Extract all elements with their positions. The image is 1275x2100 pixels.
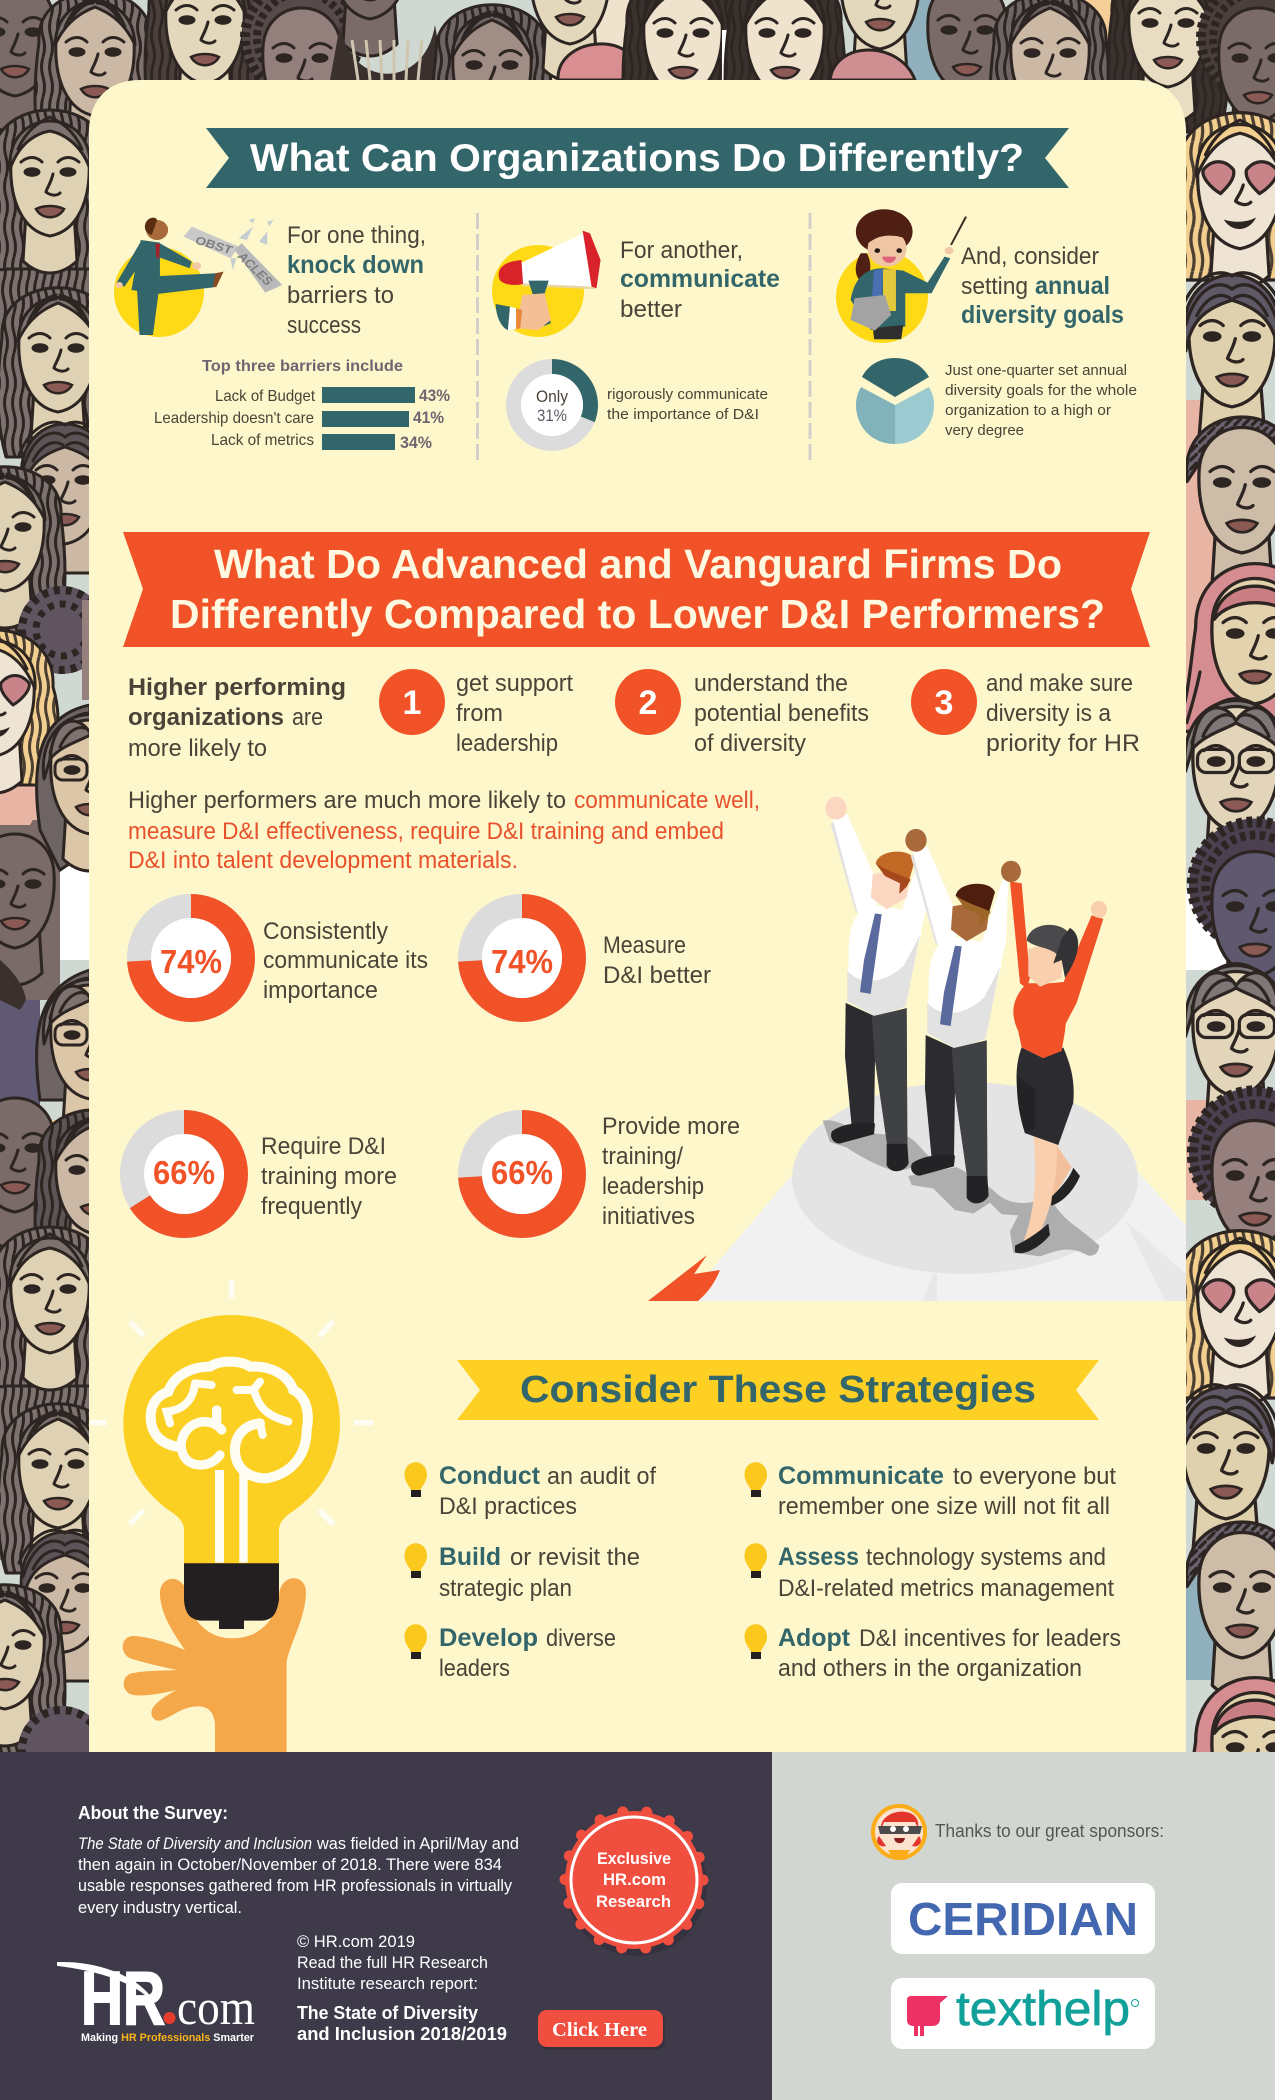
logo: HR.com: com [177, 1979, 255, 2035]
donut chart: 66% provide training: leadership [602, 1173, 704, 1200]
strategy: conduct: Conduct [439, 1462, 541, 1490]
strategy: communicate: to everyone but [953, 1463, 1116, 1490]
heading banner: What Can Organizations Do Differently? [206, 128, 1069, 188]
strategy: communicate [778, 1462, 1116, 1520]
strategy: adopt: D&I incentives for leaders [859, 1625, 1121, 1652]
strategy: communicate: remember one size will not fit all [778, 1493, 1110, 1520]
list: strategies right column [744, 1462, 1121, 1682]
text: just one-quarter: Just one-quarter set annual [945, 362, 1127, 379]
top row of faces [0, 0, 1275, 174]
donut chart: 66% require training: frequently [261, 1193, 362, 1220]
donut chart: only 31%: Only [536, 387, 568, 406]
bar chart: top three barriers: 41% [413, 408, 444, 427]
bar chart: top three barriers: 34% [400, 433, 432, 452]
donut chart: 66% require training: 66% [153, 1154, 215, 1191]
numbered item 3: diversity is a [986, 700, 1112, 727]
numbered item 2: 2 [639, 684, 657, 722]
text: about the survey: was fielded in April/May and [316, 1834, 519, 1853]
text: higher performing organizations: Higher performing [128, 674, 346, 701]
strategy: conduct: D&I practices [439, 1493, 577, 1520]
text: higher performing organizations: organizations [128, 704, 284, 731]
button: Click Here [538, 2010, 665, 2050]
icon: megaphone [492, 231, 601, 337]
heading banner: What Do Advanced and Vanguard Firms Do: What Do Advanced and Vanguard Firms Do [214, 541, 1062, 587]
strategy: develop [439, 1624, 616, 1682]
text: knock down: knock down [287, 251, 424, 279]
strategy: build: Build [439, 1543, 501, 1571]
text: higher performing organizations: are [292, 704, 323, 731]
text: about the survey: About the Survey: [78, 1803, 228, 1823]
strategy: build [439, 1543, 640, 1602]
donut chart: 66% provide training: training/ [602, 1143, 683, 1170]
donut chart: 74% measure: 74% [491, 943, 553, 980]
text: thanks to our great sponsors: Thanks to our great sponsors: [935, 1821, 1164, 1841]
icon: man kicking through obstacles: ACLES [234, 250, 276, 288]
heading banner: What Do Advanced and Vanguard Firms Do: Differently Compared to Lower D&I Performers? [170, 591, 1105, 637]
text: report credit: © HR.com 2019 [297, 1932, 415, 1951]
logo: HR.com [58, 1956, 255, 2044]
column: knock down barriers [114, 218, 450, 452]
donut chart: 66% provide training: 66% [491, 1154, 553, 1191]
logo: texthelp: texthelp [956, 1983, 1130, 2036]
icon: bulb bullet [744, 1624, 767, 1659]
text: annual diversity goals: diversity goals [961, 301, 1124, 329]
text: about the survey: then again in October/November of 2018. There were 834 [78, 1855, 502, 1874]
donut chart: 74% consistently communicate [127, 894, 428, 1022]
donut chart: 74% measure: Measure [603, 932, 686, 959]
panel: footer about the survey [0, 1752, 772, 2100]
strategy: adopt: Adopt [778, 1624, 851, 1652]
donut chart: only 31% [506, 359, 598, 451]
donut chart: 74% measure [458, 894, 711, 1022]
donut chart: 66% require training [120, 1110, 397, 1238]
icon: mascot avatar [873, 1806, 925, 1858]
heading banner: Consider These Strategies: Consider These Strategies [520, 1369, 1036, 1411]
icon: bulb bullet [404, 1624, 427, 1659]
numbered item 3: priority for HR [986, 730, 1140, 757]
text: annual diversity goals [961, 243, 1124, 329]
donut chart: 74% measure: D&I better [603, 962, 711, 989]
logo: texthelp [891, 1978, 1155, 2049]
strategy: assess: Assess [778, 1543, 859, 1571]
text: higher performers paragraph: D&I into talent development materials. [128, 847, 518, 874]
strategy: assess [778, 1543, 1114, 1602]
strategy: adopt [778, 1624, 1121, 1682]
strategy: conduct [439, 1462, 656, 1520]
bar chart: top three barriers: Lack of Budget [215, 388, 316, 405]
bar chart: top three barriers: Lack of metrics [211, 432, 314, 449]
numbered item 3: and make sure [986, 670, 1133, 697]
text: annual diversity goals: annual [1035, 272, 1110, 300]
text: communicate better: better [620, 296, 682, 323]
icon: bulb bullet [404, 1462, 427, 1497]
numbered item 2: of diversity [694, 730, 806, 757]
column: annual diversity goals [836, 209, 1137, 444]
numbered item 1: 1 [403, 684, 421, 722]
text: about the survey: every industry vertical. [78, 1898, 242, 1917]
strategy: communicate: Communicate [778, 1462, 944, 1490]
icon: bulb bullet [744, 1543, 767, 1578]
text: report credit [297, 1932, 507, 2044]
text: about the survey: The State of Diversity and Inclusion [78, 1834, 312, 1853]
badge: Exclusive HR.com Research: Exclusive [597, 1849, 671, 1868]
button: Click Here: Click Here [552, 2019, 647, 2041]
numbered item 1: get support [456, 670, 573, 697]
text: rigorously communicate [607, 386, 768, 423]
donut chart: 74% consistently communicate: 74% [160, 943, 222, 980]
text: just one-quarter: very degree [945, 422, 1024, 439]
logo: Ceridian [891, 1883, 1155, 1954]
heading banner: Consider These Strategies [457, 1360, 1099, 1420]
numbered item 2: understand the [694, 670, 848, 697]
illustration: three celebrating professionals on platform [648, 797, 1186, 1301]
numbered item 3: 3 [935, 684, 953, 722]
bar chart: top three barriers [154, 358, 450, 452]
strategy: conduct: an audit of [547, 1463, 656, 1490]
strategy: develop: Develop [439, 1624, 538, 1652]
panel: sponsors [772, 1752, 1275, 2100]
strategy: adopt: and others in the organization [778, 1655, 1082, 1682]
text: communicate better: communicate [620, 265, 780, 293]
text: just one-quarter: organization to a high or [945, 402, 1111, 419]
right column of faces [1172, 113, 1275, 1845]
text: higher performers paragraph [128, 787, 760, 874]
numbered item 1 [379, 669, 573, 757]
text: higher performers paragraph: measure D&I effectiveness, require D&I training and embed [128, 818, 724, 845]
panel: cream content card [89, 80, 1186, 1752]
illustration: lightbulb with brain held by hand [90, 1280, 373, 1752]
logo: HR.com: Making HR Professionals Smarter [81, 2032, 255, 2044]
column: communicate better [492, 231, 780, 451]
text: rigorously communicate: rigorously communicate [607, 386, 768, 403]
icon: man kicking through obstacles: OBST [193, 234, 235, 257]
text: knock down: success [287, 312, 361, 339]
icon: man kicking through obstacles [114, 218, 282, 337]
text: report credit: The State of Diversity [297, 2003, 478, 2023]
donut chart: 66% require training: training more [261, 1163, 397, 1190]
text: higher performers paragraph: Higher performers are much more likely to [128, 787, 566, 814]
text: communicate better: For another, [620, 237, 743, 264]
strategy: build: strategic plan [439, 1575, 572, 1602]
text: just one-quarter: diversity goals for the whole [945, 382, 1137, 399]
numbered item 3 [911, 669, 1140, 757]
text: higher performing organizations: more likely to [128, 735, 267, 762]
text: report credit: Read the full HR Research [297, 1953, 488, 1972]
text: annual diversity goals: setting [961, 273, 1028, 300]
text: knock down: For one thing, [287, 222, 426, 249]
heading banner: What Do Advanced and Vanguard Firms Do [123, 532, 1150, 647]
text: higher performers paragraph: communicate well, [574, 787, 760, 814]
donut chart: 74% consistently communicate: communicate its [263, 947, 428, 974]
text: annual diversity goals: And, consider [961, 243, 1099, 270]
strategy: build: or revisit the [510, 1544, 640, 1571]
strategy: assess: technology systems and [866, 1544, 1106, 1571]
strategy: assess: D&I-related metrics management [778, 1575, 1114, 1602]
text: communicate better [620, 237, 780, 323]
strategy: develop: leaders [439, 1655, 510, 1682]
text: about the survey: usable responses gathered from HR professionals in virtually [78, 1876, 512, 1895]
icon: bulb bullet [744, 1462, 767, 1497]
badge: Exclusive HR.com Research [565, 1811, 707, 1956]
numbered item 2 [615, 669, 869, 757]
text: about the survey [78, 1803, 519, 1917]
left column of faces [0, 110, 155, 1794]
donut chart: 66% provide training: Provide more [602, 1113, 740, 1140]
donut chart: 66% provide training [458, 1110, 740, 1238]
badge: Exclusive HR.com Research: Research [596, 1892, 671, 1911]
text: just one-quarter [945, 362, 1137, 439]
text: report credit: Institute research report: [297, 1974, 478, 1993]
heading banner: What Can Organizations Do Differently?: What Can Organizations Do Differently? [250, 137, 1024, 180]
icon: bulb bullet [404, 1543, 427, 1578]
donut chart: only 31%: 31% [537, 406, 567, 425]
numbered item 2: potential benefits [694, 700, 869, 727]
donut chart: 66% provide training: initiatives [602, 1203, 695, 1230]
text: higher performing organizations [128, 674, 346, 762]
text: knock down: barriers to [287, 282, 394, 309]
bar chart: top three barriers: 43% [419, 386, 450, 405]
text: report credit: and Inclusion 2018/2019 [297, 2024, 507, 2044]
list: strategies left column [404, 1462, 656, 1682]
strategy: develop: diverse [546, 1625, 616, 1652]
numbered item 1: from [456, 700, 503, 727]
donut chart: 74% consistently communicate: Consistently [263, 918, 388, 945]
badge: Exclusive HR.com Research: HR.com [603, 1870, 666, 1889]
bar chart: top three barriers: Top three barriers include [202, 358, 403, 375]
pie chart: one quarter [856, 358, 934, 444]
donut chart: 66% require training: Require D&I [261, 1133, 386, 1160]
donut chart: 74% consistently communicate: importance [263, 977, 378, 1004]
text: knock down [287, 222, 426, 339]
logo: HR.com: HR [81, 1956, 165, 2040]
text: rigorously communicate: the importance of D&I [607, 406, 759, 423]
icon: teacher with pointer [836, 209, 966, 343]
bar chart: top three barriers: Leadership doesn't care [154, 410, 314, 427]
logo: Ceridian: CERIDIAN [908, 1893, 1138, 1945]
numbered item 1: leadership [456, 730, 558, 757]
